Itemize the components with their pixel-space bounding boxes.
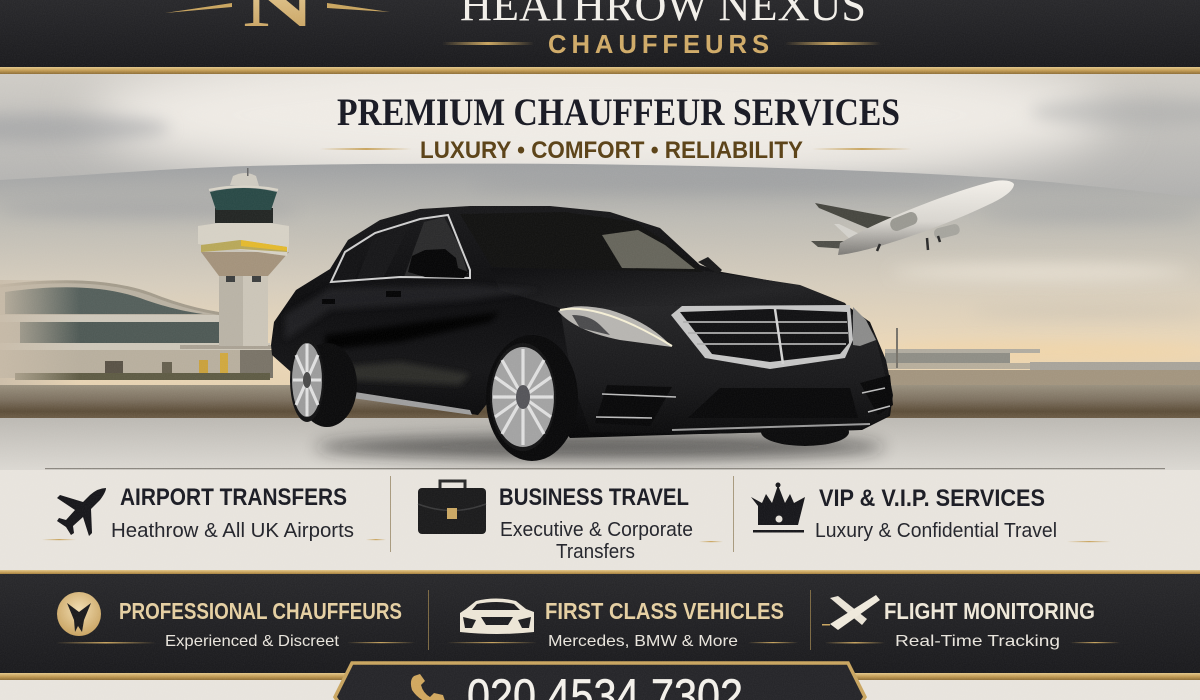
service: business travel: Executive & Corporate — [500, 519, 693, 541]
icon: airplane — [57, 488, 106, 536]
phone plaque — [335, 663, 865, 700]
icon: briefcase — [418, 481, 486, 534]
black sedan car — [271, 206, 893, 461]
service: VIP: VIP & V.I.P. SERVICES — [819, 485, 1045, 512]
service: business travel — [418, 481, 723, 563]
service: VIP: Luxury & Confidential Travel — [815, 520, 1057, 542]
front wheel — [486, 335, 578, 461]
icon: car front — [460, 598, 534, 634]
side mirror — [408, 249, 468, 278]
logo — [165, 0, 390, 40]
side reflections — [285, 285, 540, 385]
lower air intakes — [595, 375, 893, 430]
windshield — [460, 212, 703, 272]
service: airport transfers: AIRPORT TRANSFERS — [120, 484, 347, 511]
gold divider above dark panel — [0, 570, 1200, 575]
front fascia — [560, 305, 890, 434]
airport terminal and control tower — [0, 168, 289, 385]
service: business travel: Transfers — [556, 541, 635, 563]
service: VIP — [751, 482, 1111, 542]
distant terminal on the right — [885, 328, 1200, 385]
icon: white plane — [822, 595, 880, 630]
control tower — [198, 168, 289, 346]
terminal building — [0, 282, 273, 380]
brand subtitle — [442, 29, 881, 59]
icon: crown — [751, 482, 805, 532]
feature: first class vehicles — [447, 598, 798, 650]
tagline: LUXURY • COMFORT • RELIABILITY — [420, 137, 803, 164]
feature: first class vehicles: Mercedes, BMW & More — [548, 633, 738, 650]
feature: professional chauffeurs — [56, 592, 415, 650]
rear wheel — [290, 338, 357, 427]
feature: flight monitoring — [822, 595, 1120, 650]
hood — [490, 268, 855, 318]
feature: first class vehicles: FIRST CLASS VEHICLES — [545, 598, 784, 624]
airplane — [811, 180, 1014, 255]
service: airport transfers — [42, 484, 386, 542]
door handles — [322, 291, 401, 304]
headlight — [558, 306, 672, 347]
sill chrome — [342, 390, 472, 415]
background: paper and sky — [0, 40, 1200, 470]
icon: phone — [411, 674, 446, 700]
feature: professional chauffeurs: Experienced & Discreet — [165, 633, 340, 650]
panel: main services — [0, 468, 1200, 570]
icon: gold badge — [57, 592, 101, 636]
car shadow — [315, 434, 885, 460]
feature: flight monitoring: FLIGHT MONITORING — [884, 598, 1095, 624]
feature: flight monitoring: Real-Time Tracking — [895, 633, 1060, 650]
grille — [671, 305, 853, 369]
panel: features — [0, 574, 1200, 674]
right headlight — [853, 307, 876, 346]
header bar — [0, 0, 1200, 68]
service: airport transfers: Heathrow & All UK Airports — [111, 520, 354, 542]
body shell — [271, 206, 893, 438]
brand subtitle: CHAUFFEURS — [548, 29, 774, 59]
service: business travel: BUSINESS TRAVEL — [499, 484, 689, 511]
footer strip — [0, 673, 1200, 700]
feature: professional chauffeurs: PROFESSIONAL CHAUFFEURS — [119, 598, 402, 624]
gold divider under header — [0, 67, 1200, 74]
side windows — [331, 215, 470, 282]
far mirror — [698, 257, 722, 274]
headline: PREMIUM CHAUFFEUR SERVICES — [337, 91, 900, 134]
far front wheel — [761, 418, 849, 446]
